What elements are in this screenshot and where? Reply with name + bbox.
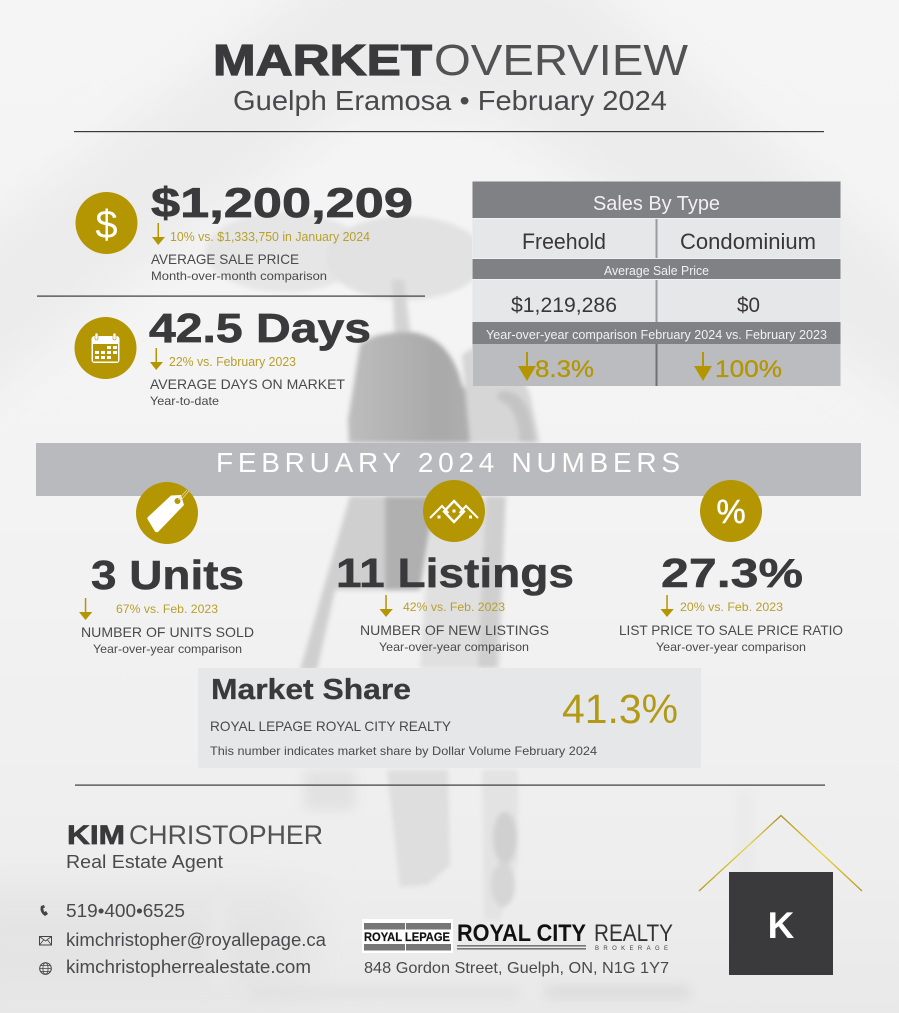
panel: market share bbox=[198, 668, 701, 768]
arrow down bbox=[150, 348, 163, 370]
title: OVERVIEW bbox=[434, 36, 688, 85]
arrow down bbox=[152, 223, 165, 245]
logo: Royal City Realty: ROYAL CITY bbox=[457, 920, 586, 947]
change text: 10% vs. $1,333,750 in January 2024 bbox=[170, 230, 370, 244]
percent changes: 100% bbox=[715, 356, 782, 383]
contact: phone: 519•400•6525 bbox=[66, 901, 185, 921]
percent changes: 8.3% bbox=[535, 356, 594, 383]
stat: average sale price bbox=[76, 179, 413, 283]
note: This number indicates market share by Dollar Volume February 2024 bbox=[210, 744, 597, 758]
average sale price band: Average Sale Price bbox=[604, 263, 709, 278]
heading: Market Share bbox=[211, 674, 411, 706]
value: 11 Listings bbox=[336, 550, 574, 596]
icon: calendar bbox=[74, 317, 136, 379]
label: LIST PRICE TO SALE PRICE RATIO bbox=[619, 622, 843, 638]
brokerage name: ROYAL LEPAGE ROYAL CITY REALTY bbox=[210, 718, 452, 734]
sublabel: Year-over-year comparison bbox=[379, 640, 529, 654]
change text: 42% vs. Feb. 2023 bbox=[403, 600, 505, 614]
panel: sales by type table bbox=[472, 181, 841, 386]
contact: website: kimchristopherrealestate.com bbox=[66, 957, 311, 977]
label: AVERAGE DAYS ON MARKET bbox=[150, 376, 345, 392]
column headers bbox=[472, 219, 840, 258]
value: 27.3% bbox=[661, 550, 803, 596]
price values: $0 bbox=[737, 294, 760, 317]
logo: Royal City Realty: REALTY bbox=[594, 920, 673, 947]
sublabel: Year-to-date bbox=[150, 394, 219, 408]
arrow down bbox=[380, 595, 393, 617]
change text: 67% vs. Feb. 2023 bbox=[116, 602, 218, 616]
stat: new listings bbox=[336, 480, 574, 654]
label: NUMBER OF NEW LISTINGS bbox=[360, 622, 549, 638]
banner: February 2024 numbers: FEBRUARY 2024 NUMBERS bbox=[216, 447, 680, 478]
sublabel: Month-over-month comparison bbox=[151, 269, 327, 283]
change text: 20% vs. Feb. 2023 bbox=[680, 600, 783, 614]
office address: 848 Gordon Street, Guelph, ON, N1G 1Y7 bbox=[364, 960, 669, 977]
arrow down bbox=[660, 595, 674, 617]
year-over-year band bbox=[472, 322, 840, 344]
icon: dollar sign: $ bbox=[95, 203, 118, 247]
percent changes bbox=[472, 344, 840, 386]
arrow down bbox=[79, 598, 92, 620]
logo: Royal LePage bbox=[362, 919, 453, 953]
logo: K house bbox=[699, 816, 862, 975]
share value: 41.3% bbox=[562, 686, 678, 732]
icon: house roofs bbox=[423, 480, 485, 542]
value: 3 Units bbox=[91, 552, 244, 598]
icon: percent: % bbox=[716, 493, 746, 530]
logo: Royal City Realty bbox=[457, 920, 673, 952]
logo: Royal City Realty: BROKERAGE bbox=[595, 946, 668, 952]
sublabel: Year-over-year comparison bbox=[93, 642, 242, 656]
column headers: Condominium bbox=[680, 229, 816, 254]
column headers: Freehold bbox=[522, 229, 606, 254]
price values bbox=[472, 280, 840, 322]
agent title: Real Estate Agent bbox=[66, 852, 223, 872]
logo: Royal LePage: ROYAL LEPAGE bbox=[364, 932, 450, 944]
price values: $1,219,286 bbox=[511, 294, 617, 317]
table header: Sales By Type bbox=[593, 193, 720, 215]
icon: dollar sign bbox=[76, 192, 138, 254]
subtitle: Guelph Eramosa • February 2024 bbox=[233, 85, 667, 116]
label: AVERAGE SALE PRICE bbox=[151, 251, 299, 267]
icon: percent bbox=[700, 480, 762, 542]
value: 42.5 Days bbox=[149, 305, 371, 351]
title: MARKET bbox=[213, 36, 432, 85]
sublabel: Year-over-year comparison bbox=[656, 640, 806, 654]
label: NUMBER OF UNITS SOLD bbox=[81, 624, 254, 640]
average sale price band bbox=[472, 259, 840, 279]
banner: February 2024 numbers bbox=[36, 443, 861, 496]
contact: email: kimchristopher@royallepage.ca bbox=[66, 930, 327, 950]
agent name: KIM bbox=[67, 820, 125, 850]
stat: list price to sale price ratio bbox=[619, 480, 843, 654]
icon: price tag bbox=[136, 482, 198, 544]
stat: average days on market bbox=[74, 305, 371, 408]
value: $1,200,209 bbox=[151, 179, 413, 226]
logo: K house: K bbox=[768, 905, 795, 946]
stat: units sold bbox=[79, 482, 254, 656]
change text: 22% vs. February 2023 bbox=[169, 355, 296, 369]
year-over-year band: Year-over-year comparison February 2024 vs. February 2023 bbox=[486, 327, 827, 342]
table header bbox=[472, 182, 840, 218]
title bbox=[213, 36, 688, 85]
agent name: CHRISTOPHER bbox=[129, 820, 323, 850]
